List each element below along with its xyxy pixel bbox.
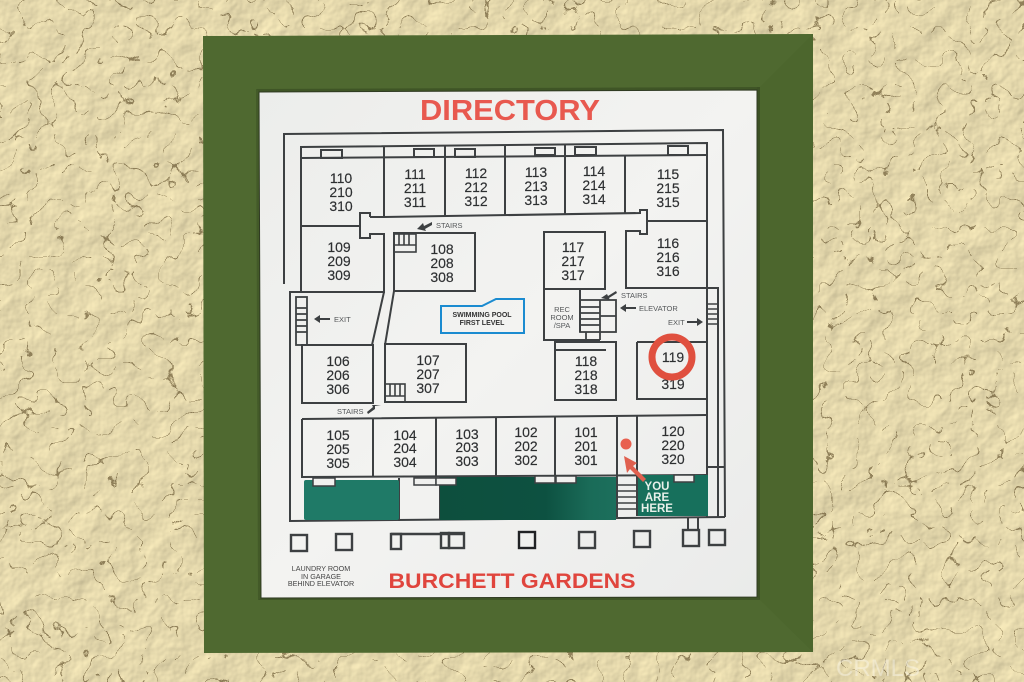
- green sign frame: [203, 34, 813, 653]
- unit numbers: 220: [661, 437, 685, 453]
- green area right with you are here: HERE: [641, 503, 673, 515]
- unit numbers: 106: [326, 353, 350, 369]
- unit numbers: 308: [430, 269, 454, 285]
- unit numbers: 302: [514, 452, 538, 468]
- exit stairs: left: [296, 297, 307, 345]
- unit numbers: 316: [656, 263, 680, 279]
- unit numbers: 203: [455, 439, 479, 455]
- unit numbers: 212: [464, 179, 488, 195]
- unit numbers: 102: [514, 424, 538, 440]
- small labels: /SPA: [554, 321, 570, 330]
- unit numbers: 305: [326, 455, 350, 471]
- unit numbers: 112: [465, 165, 487, 181]
- unit numbers: 216: [656, 249, 680, 265]
- unit numbers: 105: [326, 427, 350, 443]
- unit numbers: 314: [582, 191, 606, 207]
- green area right with you are here: [638, 475, 708, 516]
- unit numbers: 111: [404, 166, 426, 182]
- unit numbers: 310: [329, 198, 353, 214]
- unit numbers: 204: [393, 440, 417, 456]
- stairs and elevator block: [580, 300, 616, 340]
- title: directory: DIRECTORY: [420, 95, 600, 127]
- unit numbers: 207: [416, 366, 440, 382]
- red circle around unit 119: [652, 337, 692, 377]
- stairs: lower left: [385, 384, 405, 402]
- unit numbers: 217: [561, 253, 585, 269]
- unit numbers: 101: [574, 424, 598, 440]
- unit numbers: 319: [661, 376, 685, 392]
- floor plan walls: [284, 130, 725, 529]
- unit numbers: 109: [327, 239, 351, 255]
- bottom squares: [291, 530, 725, 551]
- unit numbers: 114: [583, 163, 605, 179]
- unit numbers: 208: [430, 255, 454, 271]
- unit numbers: 107: [416, 352, 440, 368]
- unit numbers: 209: [327, 253, 351, 269]
- small labels: STAIRS: [337, 407, 364, 416]
- laundry note: IN GARAGE: [301, 572, 341, 581]
- laundry note: [288, 564, 354, 588]
- watermark: CRMLS: [836, 655, 920, 682]
- unit numbers: 309: [327, 267, 351, 283]
- unit numbers: 301: [574, 452, 598, 468]
- unit numbers: 312: [464, 193, 488, 209]
- green area right with you are here: ARE: [645, 492, 669, 504]
- unit numbers: 304: [393, 454, 417, 470]
- small labels: EXIT: [334, 315, 351, 324]
- unit numbers: 320: [661, 451, 685, 467]
- unit numbers: 215: [656, 180, 680, 196]
- unit numbers: 119: [662, 349, 684, 365]
- window notches along top: [321, 146, 688, 158]
- swimming pool outline: FIRST LEVEL: [460, 320, 505, 327]
- stairs: upper left: [394, 234, 416, 252]
- unit numbers: 205: [326, 441, 350, 457]
- unit numbers: 118: [575, 353, 597, 369]
- unit numbers: 211: [404, 180, 426, 196]
- unit numbers: 313: [524, 192, 548, 208]
- unit numbers: 317: [561, 267, 585, 283]
- exit stairs: right: [708, 304, 718, 324]
- unit numbers: 120: [661, 423, 685, 439]
- small labels: EXIT: [668, 318, 685, 327]
- green area left: [304, 478, 399, 520]
- unit numbers: 307: [416, 380, 440, 396]
- unit numbers: 206: [326, 367, 350, 383]
- green area centre: [414, 476, 616, 520]
- unit numbers: 210: [329, 184, 353, 200]
- directory panel: [259, 90, 757, 598]
- unit numbers: 117: [562, 239, 584, 255]
- unit numbers: 103: [455, 426, 479, 442]
- green area right with you are here: YOU: [645, 481, 669, 493]
- unit numbers: 303: [455, 453, 479, 469]
- unit numbers: 202: [514, 438, 538, 454]
- unit numbers: 104: [393, 427, 417, 443]
- unit numbers: 214: [582, 177, 606, 193]
- unit numbers: 318: [574, 381, 598, 397]
- small direction arrows: [314, 222, 703, 414]
- unit numbers: 110: [330, 170, 352, 186]
- small labels: [334, 221, 685, 416]
- you are here arrow: [624, 456, 646, 482]
- small labels: STAIRS: [621, 291, 648, 300]
- small labels: REC: [554, 305, 570, 314]
- small labels: ROOM: [550, 313, 574, 322]
- laundry note: BEHIND ELEVATOR: [288, 579, 354, 588]
- unit numbers: 218: [574, 367, 598, 383]
- unit numbers: 108: [430, 241, 454, 257]
- laundry note: LAUNDRY ROOM: [292, 564, 350, 573]
- unit numbers: 116: [657, 235, 679, 251]
- swimming pool outline: [441, 299, 524, 333]
- unit numbers: 201: [574, 438, 598, 454]
- you are here dot: [620, 438, 632, 450]
- small labels: ELEVATOR: [639, 304, 678, 313]
- unit numbers: 213: [524, 178, 548, 194]
- unit numbers: 306: [326, 381, 350, 397]
- unit numbers: [326, 163, 685, 471]
- swimming pool outline: SWIMMING POOL: [452, 312, 512, 319]
- footer title: BURCHETT GARDENS: [388, 570, 636, 593]
- unit numbers: 311: [404, 194, 426, 210]
- unit numbers: 113: [525, 164, 547, 180]
- small labels: STAIRS: [436, 221, 463, 230]
- unit numbers: 315: [656, 194, 680, 210]
- stairs at entry: [617, 485, 637, 509]
- unit numbers: 115: [657, 166, 679, 182]
